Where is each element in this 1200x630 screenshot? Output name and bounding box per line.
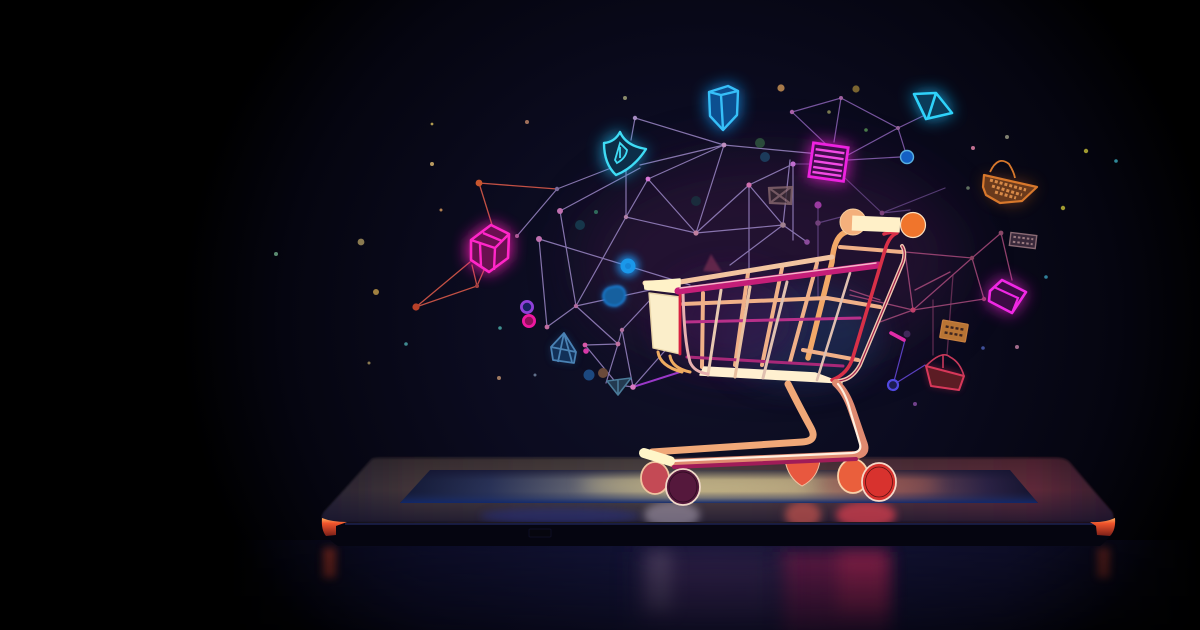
tablet side edge (323, 520, 1114, 546)
cart: top front rim (678, 265, 878, 291)
cart: base magenta underside (674, 459, 856, 467)
icon: blue cube (707, 84, 740, 132)
icon: faded blue gems (551, 333, 631, 395)
tablet (320, 458, 1120, 546)
icon: magenta box (987, 277, 1028, 315)
cart: rear post (808, 232, 846, 358)
icon: faded triangle (703, 254, 722, 272)
cart: front box panel (644, 279, 680, 354)
cart: handle (840, 209, 926, 238)
line: blue ring connector (893, 340, 925, 385)
port (529, 529, 551, 537)
cart: outer tube core (838, 246, 904, 381)
cart: rim highlight (680, 263, 876, 288)
icon: grey tag (1009, 232, 1037, 249)
floor reflection (292, 540, 1145, 630)
shopping cart (641, 209, 926, 505)
line: purple bright (633, 372, 680, 387)
cart: rear wheels (641, 457, 868, 494)
cart: front left wheel (666, 469, 700, 505)
screen glow (400, 470, 1038, 503)
cart: rear grid bars (683, 247, 902, 367)
icon: magenta document (807, 141, 850, 184)
lines: left-side network (517, 118, 830, 387)
cart: front base core (672, 384, 860, 461)
tablet front highlight (345, 523, 1096, 525)
icon: faded box (769, 187, 792, 204)
cart: rear base tube (652, 384, 813, 452)
cart: front base tube (672, 383, 864, 463)
cart: base cross bar (644, 453, 670, 461)
network nodes (412, 96, 1003, 390)
tablet screen (400, 470, 1038, 503)
cart: front grid (683, 273, 860, 380)
scattered particles (274, 84, 1118, 406)
icon: red basket (926, 355, 964, 390)
left corner light (322, 518, 347, 536)
cart: front right wheel (862, 463, 896, 501)
cart: rear top rim (645, 257, 832, 283)
icon: cyan shield (602, 130, 648, 177)
cart: outer side tube (838, 246, 904, 381)
network lines (416, 98, 1012, 387)
icon: orange basket (983, 161, 1037, 204)
icon: pink box (468, 223, 511, 274)
cart: basket floor (700, 367, 842, 383)
surface shading (322, 458, 1113, 522)
cart: under basket curves (658, 352, 690, 372)
icon: cyan diamond (911, 91, 954, 121)
right corner light (1090, 518, 1115, 536)
icon: rings (521, 301, 910, 390)
lines: box connectors (416, 183, 557, 307)
cart: front side tube (832, 232, 897, 380)
lines: right-side network (792, 98, 945, 300)
illustration: neon shopping cart on tablet (232, 0, 1167, 630)
icon: orange tag (940, 320, 968, 342)
icon: blue glow dots (603, 150, 914, 306)
icon: faded icons behind network (703, 187, 792, 272)
tablet top surface (322, 458, 1113, 522)
lines: lower-right network (850, 233, 1012, 355)
